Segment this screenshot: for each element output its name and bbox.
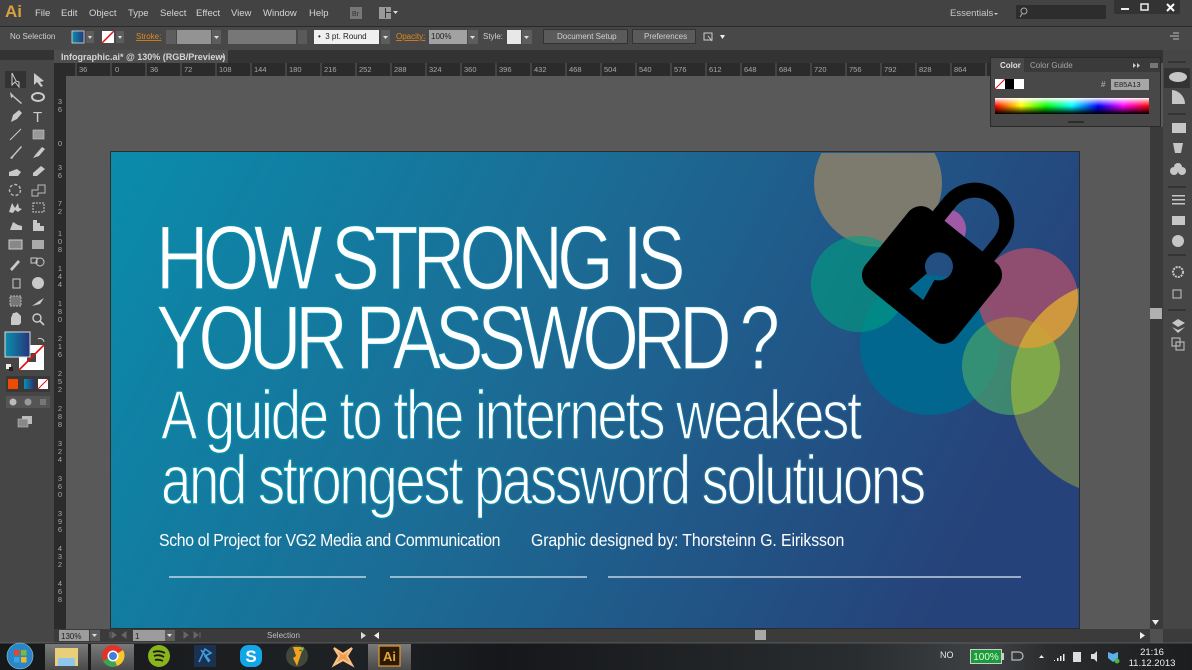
horizontal ruler: 72 — [184, 65, 192, 74]
artboard: infographic poster — [110, 151, 1080, 629]
title: YOUR PASSWORD ? — [156, 287, 780, 389]
document tab bar: × — [220, 52, 225, 62]
vertical ruler: 4 — [58, 455, 62, 464]
vertical ruler: 5 — [58, 377, 62, 386]
vertical ruler: 4 — [58, 579, 62, 588]
taskbar: illustrator: Ai — [383, 649, 396, 664]
vertical ruler: 6 — [58, 105, 62, 114]
menu items: View — [231, 8, 252, 19]
vertical ruler: 1 — [58, 264, 62, 273]
vertical ruler: 6 — [58, 350, 62, 359]
menu items: Type — [128, 8, 149, 19]
vertical ruler: 0 — [58, 139, 62, 148]
vertical ruler: 6 — [58, 525, 62, 534]
taskbar: explorer — [45, 644, 88, 670]
color panel: Color Guide — [1030, 61, 1073, 70]
battery indicator — [970, 650, 1004, 664]
color panel: E85A13 — [1114, 80, 1141, 89]
taskbar: skype: S — [245, 647, 257, 666]
taskbar: fl studio — [286, 645, 308, 667]
tools panel — [0, 50, 54, 630]
vertical ruler: 6 — [58, 482, 62, 491]
vertical ruler: 7 — [58, 199, 62, 208]
start button — [7, 643, 33, 669]
vertical ruler: 8 — [58, 245, 62, 254]
vertical ruler: 2 — [58, 369, 62, 378]
taskbar: chrome — [91, 644, 134, 670]
zoom field — [59, 630, 89, 641]
vertical ruler: 1 — [58, 229, 62, 238]
taskbar: skype — [240, 645, 262, 667]
horizontal ruler: 0 — [115, 65, 119, 74]
tool icons — [9, 73, 45, 325]
vertical ruler: 8 — [58, 595, 62, 604]
clock: 21:16 — [1140, 647, 1164, 658]
control bar: • 3 pt. Round — [318, 32, 367, 41]
taskbar: blue app — [194, 645, 216, 667]
horizontal ruler: 432 — [534, 65, 547, 74]
vertical ruler: 3 — [58, 97, 62, 106]
vertical ruler: 3 — [58, 163, 62, 172]
vertical ruler: 3 — [58, 474, 62, 483]
horizontal ruler: 684 — [779, 65, 792, 74]
status label: Selection — [267, 631, 300, 640]
vertical ruler: 4 — [58, 280, 62, 289]
stroke swatch — [102, 31, 114, 43]
bridge and arrange buttons: Br — [352, 11, 360, 18]
vertical ruler: 2 — [58, 385, 62, 394]
horizontal ruler: 792 — [884, 65, 897, 74]
icon: padlock — [855, 161, 1040, 350]
horizontal ruler: 720 — [814, 65, 827, 74]
control bar: No Selection — [10, 32, 55, 41]
taskbar: illustrator — [368, 644, 411, 670]
horizontal ruler: 288 — [394, 65, 407, 74]
opacity field: Opacity: — [396, 32, 425, 41]
horizontal ruler: 252 — [359, 65, 372, 74]
window controls — [1114, 0, 1180, 14]
vertical ruler: 1 — [58, 342, 62, 351]
document tab bar: Infographic.ai* @ 130% (RGB/Preview) — [61, 52, 225, 62]
vertical scrollbar — [1150, 127, 1163, 629]
subtitle: A guide to the internets weakest — [161, 377, 862, 455]
menu items: Edit — [61, 8, 78, 19]
vertical ruler: 0 — [58, 490, 62, 499]
horizontal ruler: 756 — [849, 65, 862, 74]
menu bar — [0, 0, 1192, 26]
credits — [159, 530, 844, 550]
battery indicator: 100% — [973, 652, 999, 663]
workspace switcher — [950, 5, 1106, 19]
horizontal ruler: 324 — [429, 65, 442, 74]
horizontal ruler: 180 — [289, 65, 302, 74]
menu items: Window — [263, 8, 297, 19]
system tray — [940, 647, 1175, 669]
fill and stroke swatches — [5, 332, 44, 371]
horizontal ruler: 468 — [569, 65, 582, 74]
underlines — [169, 576, 1021, 578]
control bar: Preferences — [644, 32, 687, 41]
horizontal ruler: 36 — [150, 65, 158, 74]
vertical ruler: 3 — [58, 509, 62, 518]
horizontal ruler: 36 — [79, 65, 87, 74]
horizontal ruler: 540 — [639, 65, 652, 74]
menu items: File — [35, 8, 50, 19]
menu items: Effect — [196, 8, 220, 19]
vertical ruler: 8 — [58, 307, 62, 316]
menu items: Help — [309, 8, 329, 19]
system tray: NO — [940, 650, 954, 660]
vertical ruler: 8 — [58, 420, 62, 429]
decorative circles — [811, 153, 1079, 488]
status bar: 130% — [61, 632, 81, 641]
vertical ruler: 2 — [58, 334, 62, 343]
system tray: 11.12.2013 — [1129, 658, 1175, 669]
taskbar: orange app — [334, 648, 352, 665]
credits: Scho ol Project for VG2 Media and Communication — [159, 530, 500, 550]
control bar: 100% — [431, 32, 451, 41]
vertical ruler: 0 — [58, 237, 62, 246]
menu items — [35, 8, 329, 19]
style field: Style: — [483, 32, 503, 41]
color mode buttons — [6, 376, 50, 392]
horizontal ruler: 864 — [954, 65, 967, 74]
horizontal ruler: 612 — [709, 65, 722, 74]
horizontal ruler: 576 — [674, 65, 687, 74]
vertical ruler: 6 — [58, 587, 62, 596]
title — [156, 207, 780, 389]
workspace switcher: Essentials — [950, 8, 994, 19]
vertical ruler: 2 — [58, 560, 62, 569]
horizontal ruler: 396 — [499, 65, 512, 74]
color panel — [990, 58, 1160, 126]
hex value: # — [1101, 80, 1106, 89]
vertical ruler: 4 — [58, 544, 62, 553]
page field — [110, 632, 126, 638]
horizontal ruler: 144 — [254, 65, 267, 74]
horizontal ruler: 504 — [604, 65, 617, 74]
tool icons: T — [33, 109, 42, 126]
subtitle: and strongest password solutiuons — [161, 442, 926, 520]
align icon — [704, 33, 712, 41]
menu items: Select — [160, 8, 187, 19]
menu items: Object — [89, 8, 117, 19]
vertical ruler — [54, 63, 66, 629]
horizontal ruler: 648 — [744, 65, 757, 74]
vertical ruler: 2 — [58, 447, 62, 456]
horizontal ruler: 216 — [324, 65, 337, 74]
dock icons — [1169, 72, 1187, 350]
right dock panel — [1163, 50, 1192, 630]
color panel: Color — [1000, 61, 1021, 70]
control bar — [0, 27, 1192, 50]
bridge and arrange buttons — [350, 7, 398, 19]
control bar: Document Setup — [557, 32, 617, 41]
color spectrum — [995, 98, 1149, 114]
subtitle — [161, 377, 926, 520]
horizontal ruler: 108 — [219, 65, 232, 74]
preferences button — [632, 30, 696, 44]
screen mode buttons — [6, 396, 50, 427]
horizontal ruler: 828 — [919, 65, 932, 74]
vertical ruler: 2 — [58, 404, 62, 413]
fill swatch — [72, 31, 84, 43]
credits: Graphic designed by: Thorsteinn G. Eiriksson — [531, 530, 844, 550]
horizontal scrollbar — [374, 632, 379, 639]
vertical ruler: 4 — [58, 272, 62, 281]
color swatches — [995, 79, 1005, 89]
vertical ruler: 2 — [58, 207, 62, 216]
stroke field: Stroke: — [136, 32, 161, 41]
vertical ruler: 3 — [58, 552, 62, 561]
vertical ruler: 8 — [58, 412, 62, 421]
status bar — [0, 629, 1192, 643]
status bar: 1 — [135, 632, 140, 641]
vertical ruler: 9 — [58, 517, 62, 526]
logo: Ai: Ai — [5, 2, 22, 21]
horizontal ruler — [55, 63, 1160, 76]
document tab bar — [0, 50, 1192, 63]
taskbar: spotify — [148, 645, 170, 667]
brush field — [314, 30, 379, 44]
horizontal ruler: 360 — [464, 65, 477, 74]
vertical ruler: 6 — [58, 171, 62, 180]
vertical ruler: 1 — [58, 299, 62, 308]
taskbar — [0, 643, 1192, 670]
vertical ruler: 0 — [58, 315, 62, 324]
document setup button — [544, 30, 628, 44]
title: HOW STRONG IS — [156, 207, 686, 309]
vertical ruler: 3 — [58, 439, 62, 448]
